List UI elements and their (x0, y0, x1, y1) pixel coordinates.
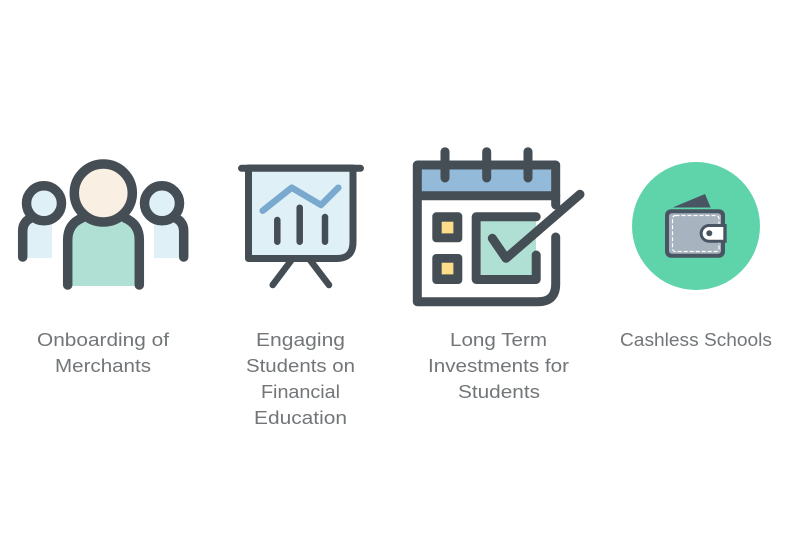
label: Long Term Investments for Students: Investments for (428, 355, 569, 376)
label: Engaging Students on Financial Education: Students on (246, 355, 355, 376)
label: Onboarding of Merchants: Onboarding of (37, 329, 170, 350)
label: Long Term Investments for Students: Long Term (450, 329, 547, 350)
label: Engaging Students on Financial Education: Education (254, 407, 347, 428)
label: Long Term Investments for Students (428, 329, 569, 402)
label: Onboarding of Merchants: Merchants (55, 355, 151, 376)
icon: calendar with check mark (417, 152, 580, 302)
label: Engaging Students on Financial Education (246, 329, 355, 428)
label: Engaging Students on Financial Education: Financial (261, 381, 340, 402)
label: Engaging Students on Financial Education: Engaging (256, 329, 345, 350)
icon: people group (23, 164, 184, 286)
icon: wallet in green circle (632, 162, 760, 290)
label: Onboarding of Merchants (37, 329, 170, 376)
label: Long Term Investments for Students: Students (458, 381, 540, 402)
label: Cashless Schools: Cashless Schools (620, 329, 772, 350)
icon: presentation board (242, 168, 360, 285)
